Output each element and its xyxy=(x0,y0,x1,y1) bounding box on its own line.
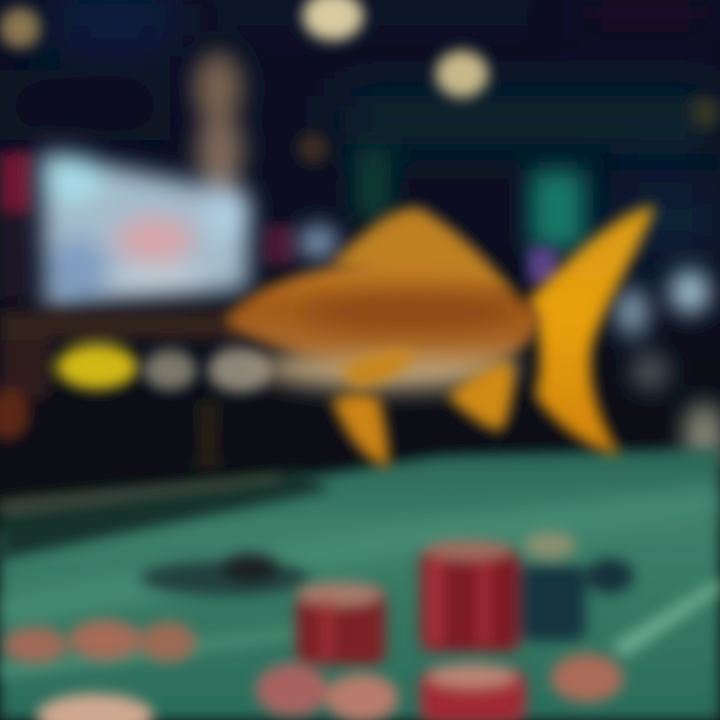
poker chip stacks xyxy=(3,532,634,720)
dark chips on the table xyxy=(140,553,310,596)
fish belly haze xyxy=(260,346,520,390)
fish belly shadow xyxy=(300,294,520,330)
blue stack xyxy=(518,532,634,641)
casino table xyxy=(0,448,720,720)
ceiling lights xyxy=(0,0,720,164)
fish dorsal fin xyxy=(330,208,515,295)
accents: red and magenta xyxy=(0,152,558,300)
goldfish xyxy=(225,205,655,468)
fish anal fin xyxy=(448,362,513,432)
tall red stack xyxy=(420,540,520,652)
decorative tower xyxy=(194,52,244,220)
fish body xyxy=(225,262,540,370)
background glows and ceiling xyxy=(0,0,720,260)
screen panel xyxy=(40,150,338,310)
fish pectoral fin xyxy=(340,351,415,388)
green columns xyxy=(355,150,585,250)
fish ventral fin xyxy=(332,394,388,468)
left chips row xyxy=(3,620,196,663)
front chips xyxy=(256,654,623,720)
counter with yellow sign xyxy=(0,310,272,470)
right-side lights xyxy=(616,270,720,470)
bottom left chip xyxy=(37,694,153,720)
fish tail xyxy=(528,205,655,455)
centre red stack xyxy=(296,582,386,665)
